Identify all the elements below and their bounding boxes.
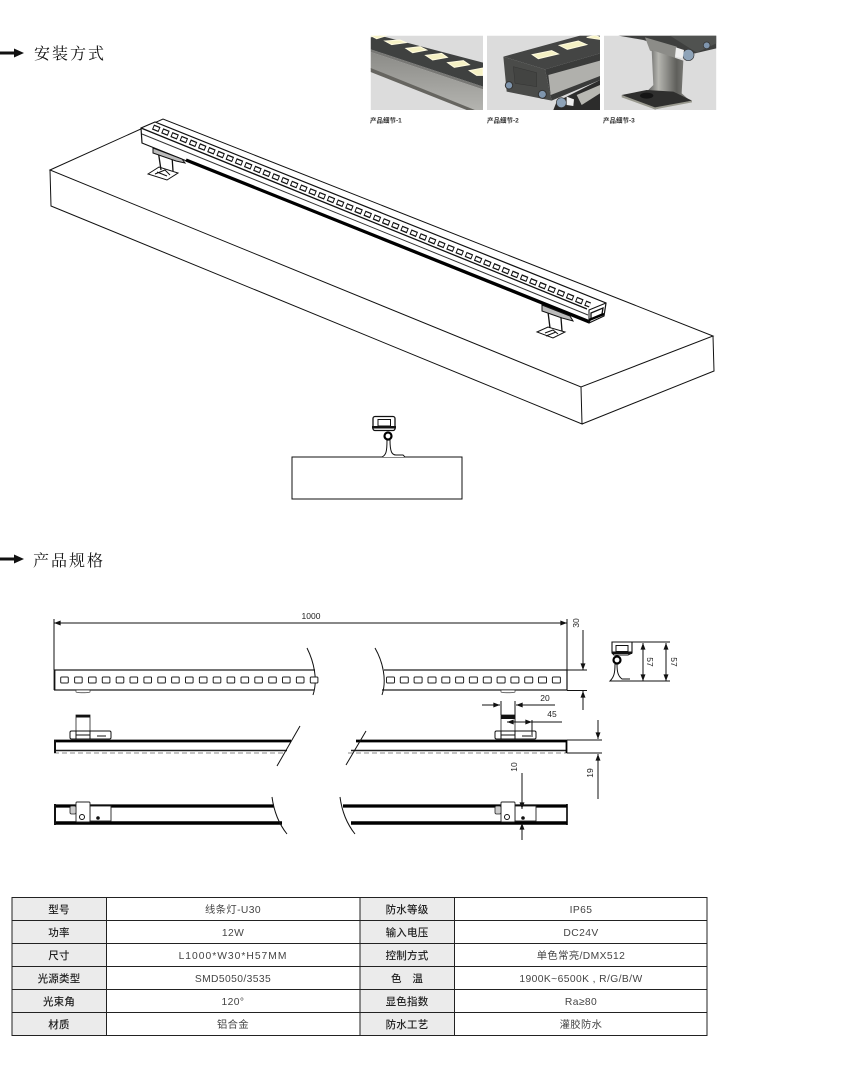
row: model / IP: 型号 [48, 903, 70, 916]
right mounting bracket [537, 305, 573, 338]
dimension numbers: 19 [585, 768, 595, 778]
end profile [610, 642, 632, 681]
LED row [153, 127, 590, 305]
row: power / voltage: 输入电压 [386, 926, 429, 939]
LED tiles, left [61, 677, 318, 683]
row: model / IP: IP65 [570, 905, 592, 916]
dimension numbers: 57 [669, 657, 679, 667]
LED tiles, right [386, 677, 560, 683]
label cell backgrounds [12, 897, 454, 1035]
dimension numbers: 45 [547, 709, 557, 719]
row: size / control: 单色常亮/DMX512 [537, 949, 625, 962]
row: power / voltage: DC24V [563, 928, 599, 939]
row: beam angle / CRI: 光束角 [43, 995, 75, 1008]
dimension numbers [302, 611, 679, 778]
heading: installation [0, 45, 106, 63]
dimension drawing [54, 611, 679, 840]
dimension numbers: 57 [645, 657, 655, 667]
photo captions [370, 116, 635, 124]
photo: detail 3 [604, 36, 716, 110]
product detail photos [371, 35, 716, 110]
left mounting bracket [148, 148, 185, 180]
dimension lines [54, 619, 670, 840]
installation drawing: slab with light bar [50, 119, 714, 424]
row: light source / colour temperature: 1900K~6500K , R/G/B/W [519, 974, 643, 985]
cross section installed on slab [292, 416, 462, 499]
heading: installation: 安装方式 [34, 45, 106, 63]
right bracket, side [495, 715, 536, 739]
light bar body [141, 122, 606, 323]
row: beam angle / CRI: 120° [222, 997, 244, 1008]
left bracket, bottom [70, 802, 111, 822]
row: beam angle / CRI [43, 995, 597, 1008]
row: light source / colour temperature: 光源类型 [38, 972, 80, 985]
row: power / voltage: 功率 [48, 926, 70, 939]
side view [54, 715, 567, 766]
row: power / voltage: 12W [222, 928, 244, 939]
specification table [12, 897, 707, 1036]
photo captions: 产品细节-1 [370, 116, 402, 124]
dimension numbers: 20 [540, 693, 550, 703]
row: light source / colour temperature: 色 温 [391, 972, 423, 985]
front view [54, 648, 567, 695]
row: light source / colour temperature [38, 972, 643, 985]
dimension numbers: 30 [571, 618, 581, 628]
heading: specifications [0, 552, 105, 570]
row: size / control: 控制方式 [386, 949, 429, 962]
row: material / waterproofing: 灌胶防水 [560, 1018, 603, 1031]
row: size / control [48, 949, 625, 962]
photo: detail 2 [487, 35, 600, 110]
photo captions: 产品细节-2 [487, 116, 519, 124]
table grid [12, 897, 707, 1036]
row: material / waterproofing: 防水工艺 [386, 1018, 428, 1031]
right bracket, bottom [495, 802, 536, 822]
row: beam angle / CRI: 显色指数 [386, 995, 429, 1008]
row: material / waterproofing: 铝合金 [217, 1018, 249, 1031]
heading: specifications: 产品规格 [33, 552, 105, 570]
dimension numbers: 10 [509, 762, 519, 772]
row: power / voltage [48, 926, 599, 939]
dimension numbers: 1000 [302, 611, 321, 621]
row: model / IP: 线条灯-U30 [205, 903, 261, 916]
row: light source / colour temperature: SMD5050/3535 [195, 974, 271, 985]
slab [50, 119, 714, 424]
row: beam angle / CRI: Ra≥80 [565, 997, 597, 1008]
left bracket, side [70, 715, 111, 739]
row: material / waterproofing: 材质 [48, 1018, 70, 1031]
row: size / control: 尺寸 [48, 949, 70, 962]
photo captions: 产品细节-3 [603, 116, 635, 124]
row: size / control: L1000*W30*H57MM [179, 951, 287, 962]
row: model / IP: 防水等级 [386, 903, 429, 916]
row: model / IP [48, 903, 592, 916]
photo: detail 1 [371, 36, 483, 110]
row: material / waterproofing [48, 1018, 603, 1031]
bottom view [54, 797, 567, 834]
